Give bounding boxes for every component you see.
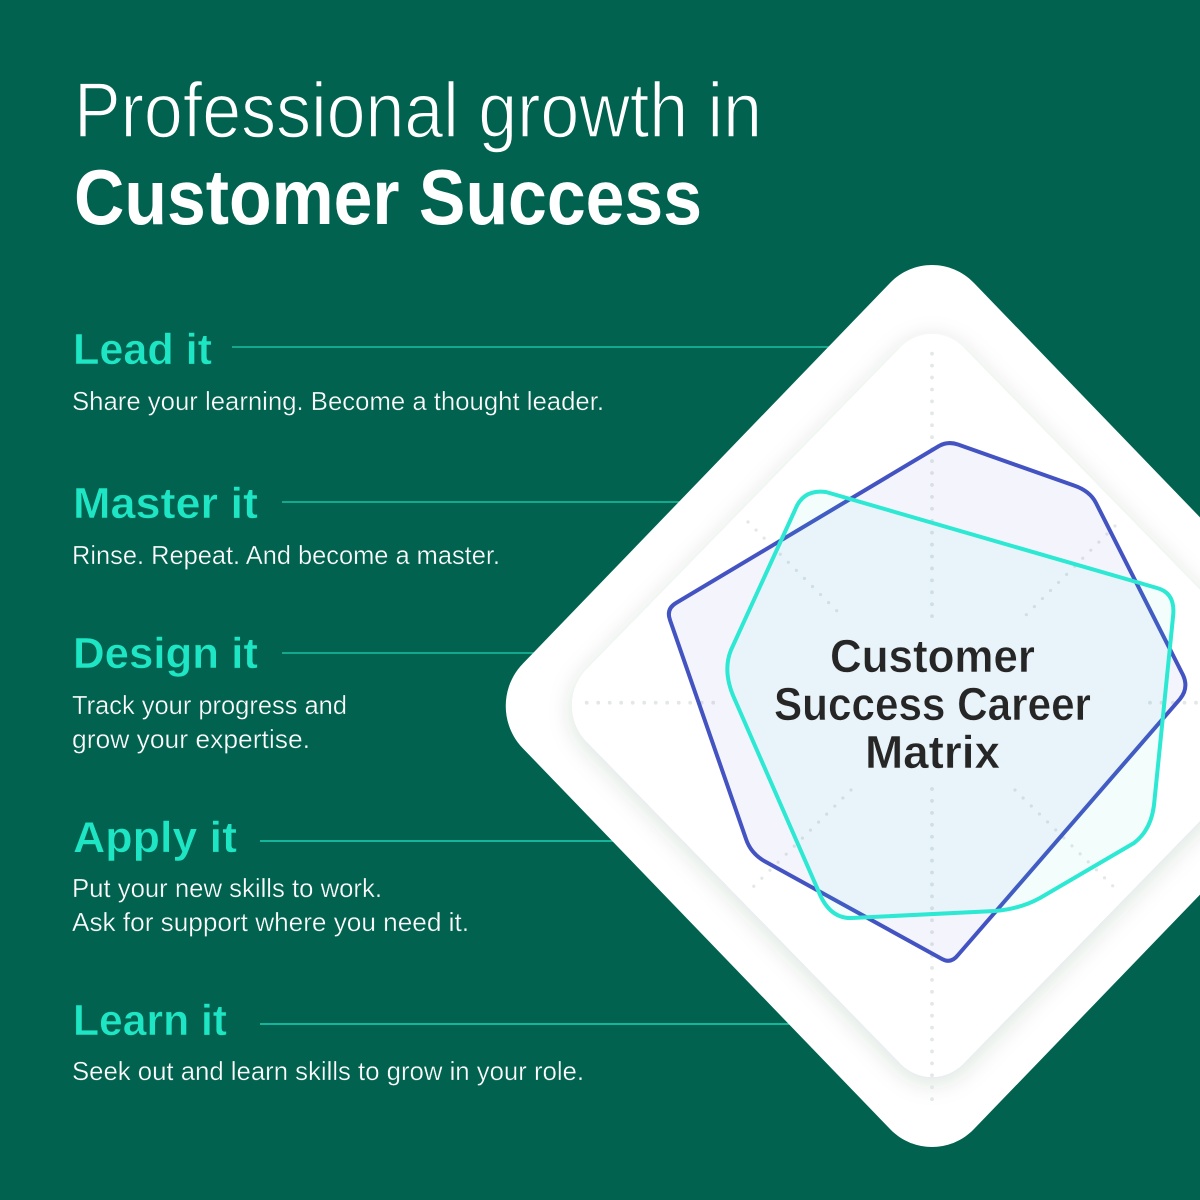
step: Learn it: Seek out and learn skills to grow in your role. [72, 1056, 584, 1086]
step: Learn it [72, 996, 584, 1086]
step: Apply it: Put your new skills to work. [72, 873, 382, 903]
step: Master it: Master it [73, 479, 258, 528]
center label [774, 630, 1091, 778]
step: Design it: Track your progress and [72, 690, 347, 720]
step: Lead it [72, 325, 604, 416]
step: Design it [72, 629, 347, 754]
blue polygon [669, 443, 1185, 961]
inner diamond with shadow [572, 334, 1200, 1077]
connector line: Design it [282, 652, 540, 654]
dotted grid lines [587, 354, 1200, 1100]
step: Apply it: Apply it [73, 813, 237, 862]
step: Design it: Design it [73, 629, 258, 678]
title [74, 66, 762, 241]
step: Apply it: Ask for support where you need it. [72, 907, 469, 937]
step: Lead it: Share your learning. Become a thought leader. [72, 386, 604, 416]
step: Learn it: Learn it [73, 996, 227, 1045]
step: Lead it: Lead it [73, 325, 212, 374]
title: Professional growth in [74, 66, 762, 154]
title: Customer Success [74, 153, 702, 241]
connector line: Learn it [260, 1023, 798, 1025]
connector line: Apply it [260, 840, 620, 842]
center label: Matrix [865, 726, 1000, 778]
step: Design it: grow your expertise. [72, 724, 310, 754]
step: Master it: Rinse. Repeat. And become a master. [72, 540, 500, 570]
center label: Success Career [774, 678, 1091, 730]
step: Master it [72, 479, 500, 570]
outer white diamond [506, 265, 1200, 1147]
step: Apply it [72, 813, 469, 937]
teal polygon [727, 492, 1173, 918]
connector line: Master it [282, 501, 686, 503]
center label: Customer [830, 630, 1035, 682]
career matrix diagram [506, 265, 1200, 1147]
connector line: Lead it [232, 346, 836, 348]
